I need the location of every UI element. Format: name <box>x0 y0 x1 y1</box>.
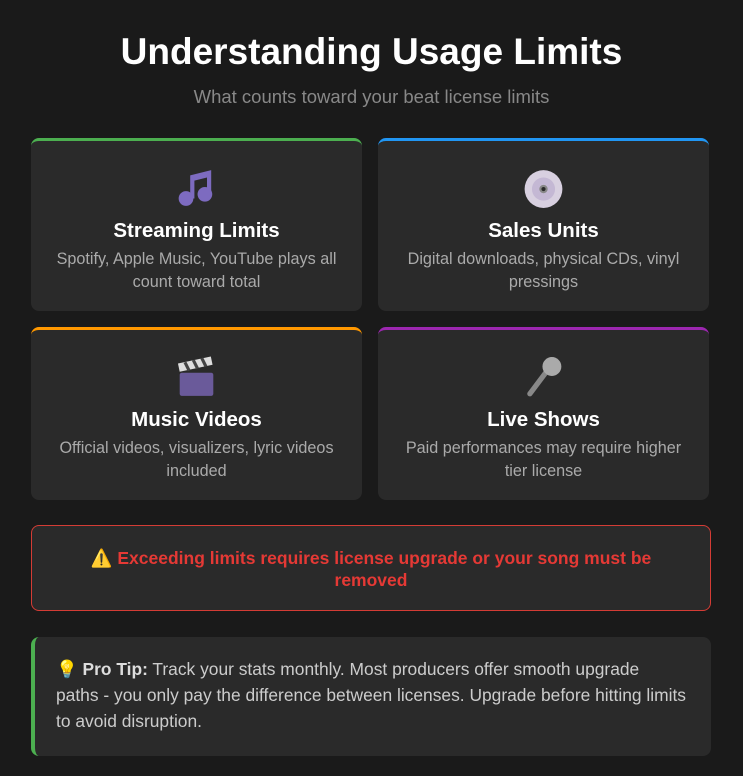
panel: streaming <box>31 138 362 311</box>
icon: disc <box>524 170 562 208</box>
panel: music videos: Music Videos <box>131 408 262 431</box>
panel: sales: Sales Units <box>488 219 599 242</box>
callout: warning: removed <box>335 570 407 590</box>
title: Understanding Usage Limits <box>121 31 622 72</box>
callout: pro tip: to avoid disruption. <box>56 711 202 731</box>
panel: live shows <box>378 327 709 500</box>
subtitle: What counts toward your beat license limits <box>194 86 549 107</box>
panel: live shows: Paid performances may require higher <box>406 439 681 457</box>
callout: pro tip: paths - you only pay the difference between licenses. Upgrade before hitting limits <box>56 685 686 705</box>
panel: streaming: Streaming Limits <box>113 219 280 242</box>
callout: warning: ⚠️ Exceeding limits requires license upgrade or your song must be <box>91 548 651 568</box>
icon: music notes <box>178 170 212 206</box>
callout: pro tip: 💡 Pro Tip: Track your stats monthly. Most producers offer smooth upgrade <box>56 659 639 679</box>
panel: live shows: Live Shows <box>487 408 600 431</box>
panel: sales <box>378 138 709 311</box>
panel: music videos <box>31 327 362 500</box>
panel: music videos: Official videos, visualizers, lyric videos included <box>59 439 334 480</box>
panel: streaming: Spotify, Apple Music, YouTube plays all count toward total <box>57 250 336 291</box>
callout: warning <box>31 525 711 611</box>
panel: sales: Digital downloads, physical CDs, vinyl pressings <box>408 250 679 291</box>
panel: live shows: tier license <box>505 462 582 480</box>
icon: clapperboard <box>178 356 214 396</box>
callout: pro tip <box>31 637 711 756</box>
icon: microphone <box>527 357 562 396</box>
